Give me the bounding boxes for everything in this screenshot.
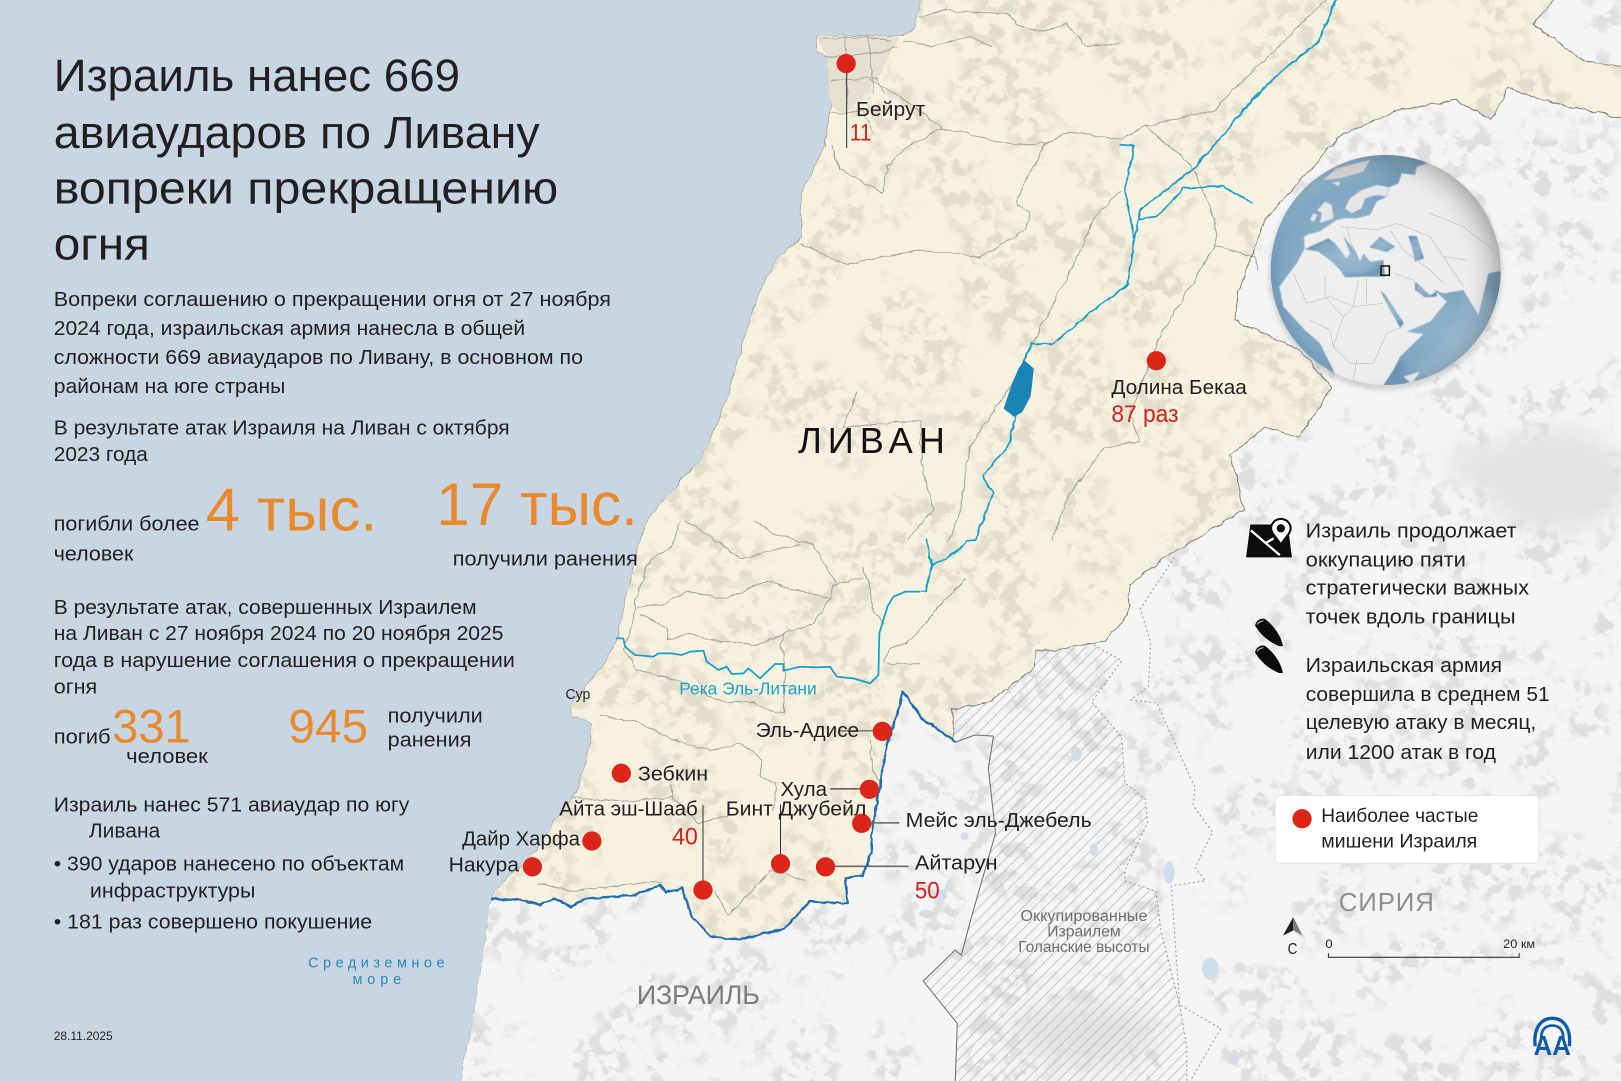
label: occupied Golan: Оккупированные [1020, 908, 1148, 925]
place labels: Айтарун [915, 851, 998, 874]
place labels: Зебкин [638, 763, 708, 786]
intro paragraph: 2024 года, израильская армия нанесла в общей [54, 317, 525, 340]
label: Tyre: Сур [565, 687, 590, 703]
title [54, 50, 558, 269]
attack rate note [1306, 654, 1550, 764]
label: occupied Golan: Голанские высоты [1018, 939, 1150, 956]
casualties since ceasefire: В результате атак, совершенных Израилем [54, 596, 477, 619]
strikes on the south: Ливана [89, 819, 161, 842]
map: land base with Lebanon, Israel and Syria [445, 0, 1621, 1081]
attack rate note: или 1200 атак в год [1306, 741, 1496, 764]
casualties since ceasefire: человек [126, 745, 209, 768]
casualties since October 2023: 2023 года [54, 443, 148, 466]
occupation note [1306, 520, 1530, 628]
intro paragraph: сложности 669 авиаударов по Ливану, в основном по [54, 346, 583, 369]
casualties since October 2023: погибли более [54, 512, 200, 535]
Beirut street grid [822, 35, 897, 134]
casualties since ceasefire: на Ливан с 27 ноября 2024 по 20 ноября 2025 [54, 622, 503, 645]
casualties since October 2023: получили ранения [453, 547, 638, 570]
strikes on the south: • 390 ударов нанесено по объектам [54, 852, 404, 875]
locator square [1381, 266, 1389, 275]
place labels: Мейс эль-Джебель [906, 809, 1092, 832]
place labels [449, 98, 1247, 904]
strikes on the south: • 181 раз совершено покушение [54, 910, 372, 933]
logo: Anadolu Agency: AA [1534, 1030, 1571, 1061]
label: river: Река Эль-Литани [679, 679, 817, 699]
Israel border [491, 692, 955, 940]
place labels: 40 [672, 824, 698, 851]
sea label [308, 956, 445, 988]
country label: Israel: ИЗРАИЛЬ [637, 980, 760, 1010]
place labels: 11 [850, 120, 871, 147]
place labels: 87 раз [1111, 401, 1179, 428]
land islands on the ocean [1310, 160, 1420, 384]
north arrow: С [1288, 941, 1297, 958]
label: occupied Golan: Израилем [1047, 924, 1121, 941]
legend: мишени Израиля [1321, 831, 1477, 853]
title: огня [54, 218, 150, 269]
scale bar: 0 [1325, 937, 1333, 951]
casualties since ceasefire: ранения [388, 728, 471, 751]
place labels: Бейрут [856, 98, 926, 121]
title: Израиль нанес 669 [54, 50, 460, 101]
strikes on the south: инфраструктуры [90, 879, 255, 902]
occupation note: точек вдоль границы [1306, 605, 1516, 628]
country label: Lebanon: ЛИВАН [798, 420, 945, 461]
intro paragraph [54, 288, 611, 398]
place labels: Долина Бекаа [1111, 376, 1247, 399]
attack rate note: Израильская армия [1306, 654, 1502, 677]
north arrow [1283, 917, 1303, 958]
strikes on the south [54, 794, 410, 933]
occupation note: стратегически важных [1306, 576, 1530, 599]
intro paragraph: Вопреки соглашению о прекращении огня от 27 ноября [54, 288, 611, 311]
legend: Наиболее частые [1321, 805, 1478, 827]
sea label: Средиземное [308, 956, 445, 972]
casualties since October 2023: 4 тыс. [206, 476, 377, 543]
place labels: Накура [449, 853, 519, 876]
occupation note: оккупацию пяти [1306, 549, 1466, 572]
casualties since October 2023 [54, 417, 638, 570]
date: 28.11.2025 [54, 1029, 113, 1043]
attack rate note: целевую атаку в месяц, [1306, 711, 1536, 734]
casualties since ceasefire: получили [388, 705, 483, 728]
country borders [1293, 213, 1493, 380]
attack rate note: совершила в среднем 51 [1306, 683, 1550, 706]
scale bar: 20 км [1503, 937, 1535, 951]
intro paragraph: районам на юге страны [54, 375, 285, 398]
Lebanon admin lines [538, 0, 1326, 915]
occupied Golan Heights hatch [923, 557, 1221, 1081]
Syria border line [952, 88, 1621, 741]
place labels: Айта эш-Шааб [559, 798, 698, 821]
logo: Anadolu Agency [1534, 1018, 1571, 1061]
casualties since ceasefire: 331 [112, 700, 191, 753]
scale bar [1325, 937, 1535, 957]
place labels: Бинт Джубейл [726, 798, 866, 821]
casualties since ceasefire: 945 [288, 700, 368, 753]
country label: Syria: СИРИЯ [1339, 889, 1434, 917]
place labels: 50 [915, 877, 940, 904]
casualties since ceasefire: погиб [54, 725, 111, 748]
place labels: Дайр Харфа [462, 828, 580, 851]
casualties since October 2023: 17 тыс. [436, 471, 638, 538]
title: авиаударов по Ливану [54, 107, 540, 158]
place labels: Хула [781, 778, 828, 801]
legend [1275, 796, 1539, 863]
casualties since ceasefire: огня [54, 676, 97, 699]
sea label: море [353, 972, 401, 988]
target markers [523, 54, 1166, 900]
globe locator [1263, 150, 1507, 390]
strikes on the south: Израиль нанес 571 авиаудар по югу [54, 794, 410, 817]
casualties since October 2023: человек [54, 542, 134, 565]
rivers [616, 0, 1336, 683]
casualties since ceasefire [54, 596, 515, 768]
small lakes [919, 746, 1238, 1065]
occupation note: Израиль продолжает [1306, 520, 1517, 543]
icon: munitions [1255, 619, 1283, 673]
place labels: Эль-Адисе [756, 719, 859, 742]
label: occupied Golan [1018, 908, 1150, 956]
leader lines [703, 64, 909, 890]
casualties since ceasefire: года в нарушение соглашения о прекращении [54, 649, 515, 672]
Beirut urban area [817, 35, 899, 114]
lake Qaraoun [1005, 362, 1033, 416]
icon: map with pin [1247, 519, 1291, 557]
ocean and seas [1263, 150, 1507, 390]
casualties since October 2023: В результате атак Израиля на Ливан с октября [54, 417, 510, 440]
title: вопреки прекращению [54, 163, 558, 214]
